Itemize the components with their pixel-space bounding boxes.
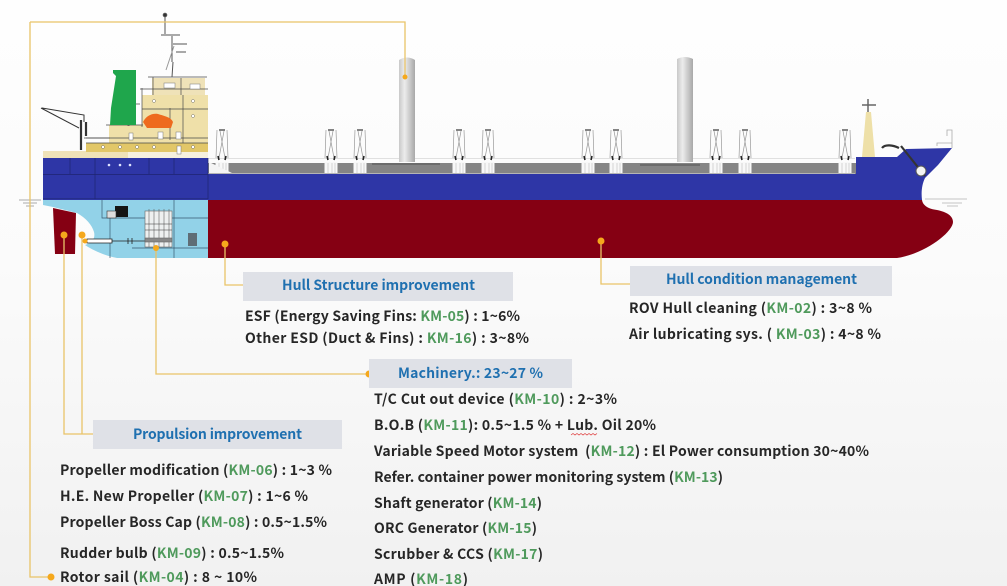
icon: bow waterline mark [925,199,967,206]
ship illustration [19,13,967,258]
text: ESF: ESF (Energy Saving Fins: KM-05) : 1~6% [245,306,521,326]
dark red lower hull [208,200,953,258]
stern crane [41,108,86,150]
rotor sail 1 [399,58,415,162]
rudder [53,208,76,254]
heading: Propulsion improvement [133,424,302,444]
text: other ESD: Other ESD (Duct & Fins) : KM-16) : 3~8% [245,328,530,348]
bow railing [937,130,952,148]
blue hull portholes [108,164,131,166]
lifeboat [143,114,173,128]
main engine [145,209,172,247]
heading: Hull condition management [666,269,857,289]
icon: stern waterline mark [19,200,41,206]
bow crane [882,145,925,176]
text: KM-17: Scrubber & CCS (KM-17) [374,544,543,564]
heading bar [630,266,892,296]
text: KM-13: Refer. container power monitoring system (KM-13) [374,467,723,487]
auxiliary unit [188,233,197,246]
cargo deck band [208,158,858,174]
text: KM-15: ORC Generator (KM-15) [374,518,537,538]
text: KM-06: Propeller modification (KM-06) : 1~3 % [60,460,333,480]
deck cranes [209,130,852,173]
rotor sail 2 [677,57,693,162]
heading: Machinery.: 23~27 % [398,363,544,383]
connector: hull condition [598,238,630,284]
blue upper hull [43,148,952,200]
text: KM-08: Propeller Boss Cap (KM-08) : 0.5~1.5% [60,512,328,532]
text: KM-14: Shaft generator (KM-14) [374,493,542,513]
bow anchor [916,166,926,176]
fore mast [862,99,876,157]
panel: machinery [369,359,870,586]
text: air lubrication: Air lubricating sys. ( KM-03) : 4~8 % [628,324,882,344]
spell-check underline [571,434,597,435]
funnel [110,70,136,125]
panel: hull structure improvement [243,272,530,348]
connector: machinery [153,245,372,378]
text: KM-12: Variable Speed Motor system (KM-12) : El Power consumption 30~40% [373,441,870,461]
panel: propulsion improvement [60,420,342,586]
light blue engine room [43,200,208,258]
heading bar [93,420,342,449]
heading bar [243,272,513,301]
connector: propulsion [60,232,93,434]
generator [107,206,128,218]
text: KM-09: Rudder bulb (KM-09) : 0.5~1.5% [60,543,285,563]
heading bar [369,359,572,388]
connector: rotor sail [30,22,408,580]
text: KM-11: B.O.B (KM-11): 0.5~1.5 % + Lub. Oil 20% [374,415,657,435]
text: ROV: ROV Hull cleaning (KM-02) : 3~8 % [629,298,873,318]
connector: hull structure [222,240,243,285]
text: KM-10: T/C Cut out device (KM-10) : 2~3% [374,389,618,409]
heading: Hull Structure improvement [282,275,475,295]
text: KM-07: H.E. New Propeller (KM-07) : 1~6 % [60,486,309,506]
structure lines [43,158,208,258]
superstructure [43,77,208,158]
panel: hull condition management [628,266,892,344]
main mast [161,13,187,77]
propeller shaft [87,238,145,244]
